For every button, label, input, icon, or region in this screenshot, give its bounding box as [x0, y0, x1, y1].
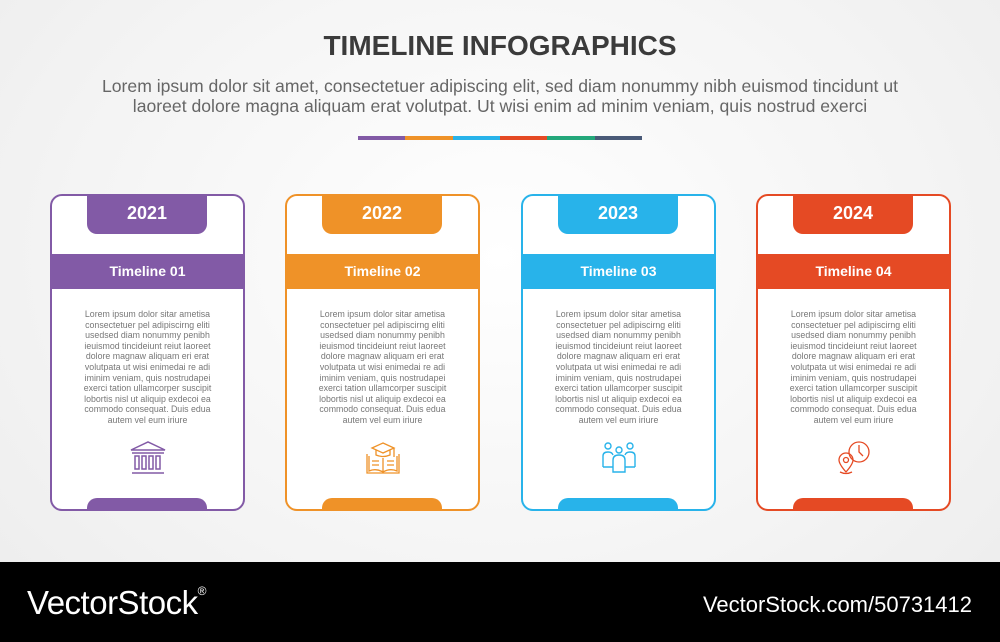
- subtitle: laoreet dolore magna aliquam erat volutpat. Ut wisi enim ad minim veniam, quis nostrud exerci: [133, 96, 867, 116]
- year tab 2022: [322, 194, 442, 234]
- year tab 2021: [87, 194, 207, 234]
- bottom tab: [793, 498, 913, 511]
- heading band: Timeline 04: [815, 263, 892, 279]
- text block: Lorem ipsum dolor sitar ametisa consectetuer pel adipiscirng eliti usedsed diam nonummy penibh ieuismod tincideiunt reiut laoreet dolore magnaw aliquam eri erat volutpata ut wisi enimedai re adi iminim veniam, quis nostrudapei exerci tation ullamcorper suscipit lobortis nisl ut aliquip exdecoi ea commodo consequat. Duis edua autem vel eum iriure: [790, 309, 917, 425]
- heading band: [521, 254, 716, 289]
- heading band: [50, 254, 245, 289]
- footer logo text: VectorStock®: [27, 584, 206, 621]
- panel: timeline 01: [50, 194, 245, 511]
- footer url: VectorStock.com/50731412: [703, 592, 972, 617]
- icon: book with cap: [366, 442, 400, 474]
- icon: location clock: [838, 441, 870, 474]
- text block: Lorem ipsum dolor sitar ametisa consectetuer pel adipiscirng eliti usedsed diam nonummy penibh ieuismod tincideiunt reiut laoreet dolore magnaw aliquam eri erat volutpata ut wisi enimedai re adi iminim veniam, quis nostrudapei exerci tation ullamcorper suscipit lobortis nisl ut aliquip exdecoi ea commodo consequat. Duis edua autem vel eum iriure: [319, 309, 446, 425]
- panel: timeline 03: [521, 194, 716, 511]
- heading band: Timeline 01: [109, 263, 186, 279]
- color divider bar: [358, 136, 642, 140]
- heading band: [756, 254, 951, 289]
- heading band: Timeline 02: [344, 263, 420, 279]
- year tab 2024: 2024: [833, 203, 873, 223]
- panel: timeline 04: [756, 194, 951, 511]
- bottom tab: [322, 498, 442, 511]
- bottom tab: [558, 498, 678, 511]
- year tab 2024: [793, 194, 913, 234]
- icon: bank: [130, 441, 166, 474]
- year tab 2023: 2023: [598, 203, 638, 223]
- footer bar: [0, 562, 1000, 642]
- panel: timeline 02: [285, 194, 480, 511]
- bottom tab: [87, 498, 207, 511]
- heading band: [285, 254, 480, 289]
- subtitle: Lorem ipsum dolor sit amet, consectetuer adipiscing elit, sed diam nonummy nibh euismod tincidunt ut: [102, 76, 898, 96]
- subtitle: [102, 76, 898, 116]
- year tab 2022: 2022: [362, 203, 402, 223]
- year tab 2023: [558, 194, 678, 234]
- text block: Lorem ipsum dolor sitar ametisa consectetuer pel adipiscirng eliti usedsed diam nonummy penibh ieuismod tincideiunt reiut laoreet dolore magnaw aliquam eri erat volutpata ut wisi enimedai re adi iminim veniam, quis nostrudapei exerci tation ullamcorper suscipit lobortis nisl ut aliquip exdecoi ea commodo consequat. Duis edua autem vel eum iriure: [555, 309, 682, 425]
- icon: people: [602, 442, 636, 473]
- title: TIMELINE INFOGRAPHICS: [323, 30, 677, 61]
- heading band: Timeline 03: [580, 263, 656, 279]
- text block: Lorem ipsum dolor sitar ametisa consectetuer pel adipiscirng eliti usedsed diam nonummy penibh ieuismod tincideiunt reiut laoreet dolore magnaw aliquam eri erat volutpata ut wisi enimedai re adi iminim veniam, quis nostrudapei exerci tation ullamcorper suscipit lobortis nisl ut aliquip exdecoi ea commodo consequat. Duis edua autem vel eum iriure: [84, 309, 211, 425]
- year tab 2021: 2021: [127, 203, 167, 223]
